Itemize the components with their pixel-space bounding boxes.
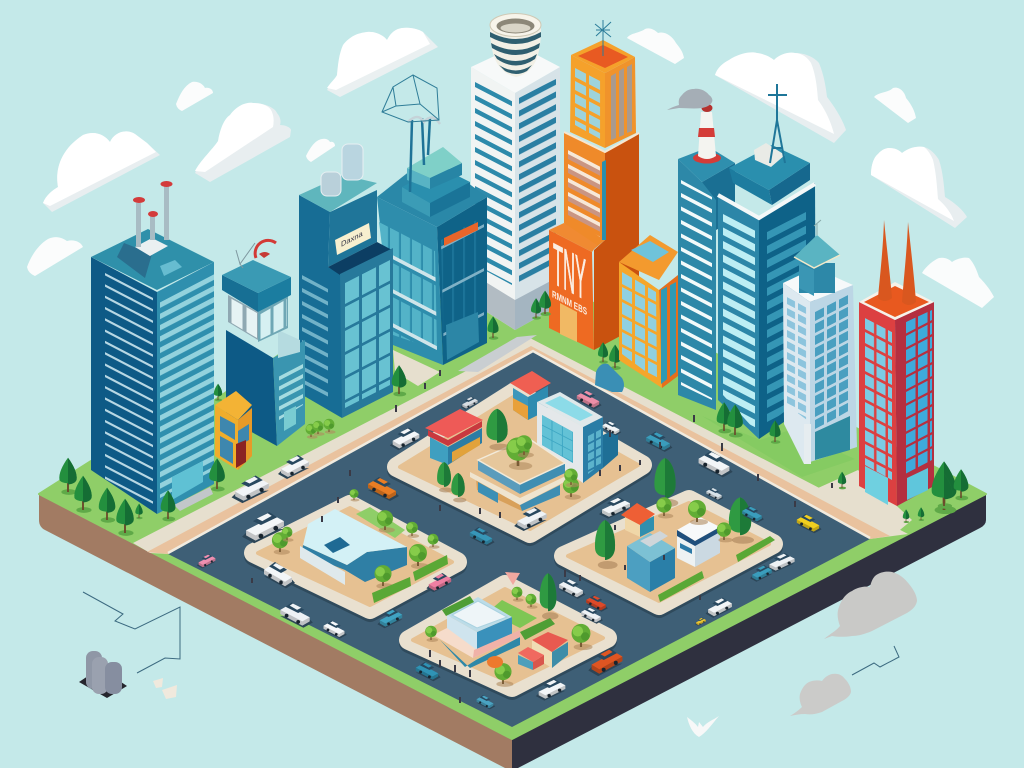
roof slab	[222, 260, 291, 312]
trees on left block	[272, 489, 440, 589]
blue glass tower with wire frame	[377, 75, 487, 365]
darker lawn under the towers	[702, 416, 855, 477]
cloud 11	[922, 258, 994, 308]
floating gray tanks	[79, 651, 127, 698]
plaza by the blue towers	[393, 350, 440, 386]
platform lawn surface	[39, 290, 986, 739]
middle right face	[594, 133, 639, 350]
yellow shop building	[215, 391, 252, 470]
roof tier	[402, 147, 470, 217]
orange planter	[487, 656, 503, 668]
tower left face	[783, 283, 810, 464]
bottom block hedges	[442, 596, 555, 640]
cloud 7	[627, 28, 684, 64]
tower roof	[471, 45, 560, 93]
cloud 10	[871, 147, 967, 228]
mid lawn conifers	[306, 365, 406, 439]
recessed dark band	[328, 242, 392, 275]
cloud 4	[176, 82, 213, 111]
mast tower	[768, 84, 787, 163]
lower body right face	[273, 340, 305, 446]
ground floor glass	[865, 466, 928, 505]
striped bowl on the roof	[490, 14, 541, 77]
rooftop glass tanks	[321, 144, 363, 196]
middle ledge	[564, 132, 639, 152]
roof antenna	[595, 20, 611, 56]
tower right face	[702, 163, 735, 230]
white and navy building	[677, 517, 720, 567]
pedestrians	[252, 370, 832, 703]
vented grill	[278, 330, 300, 358]
lawn trees by blue tower	[717, 402, 780, 444]
red tower with twin spires	[859, 220, 934, 506]
tower right face	[515, 67, 560, 330]
trees across the platform	[59, 365, 968, 536]
sign board	[335, 223, 371, 255]
cloud 2	[195, 103, 291, 182]
light blue roof warehouse	[300, 509, 407, 585]
vehicles on the road	[197, 390, 822, 709]
tower roof	[91, 229, 214, 290]
main left tower with rooftop stacks	[91, 181, 214, 514]
clouds	[27, 28, 994, 308]
top section roof	[571, 40, 635, 73]
road island: right block	[564, 458, 775, 608]
red roof houses	[518, 632, 568, 670]
trees on centre block	[437, 409, 581, 502]
roof unit	[754, 143, 785, 167]
trees on bottom block	[425, 573, 593, 687]
twin spires	[878, 220, 916, 305]
entrance glass	[172, 461, 203, 500]
tower roof	[299, 175, 377, 212]
hedges on left block	[372, 555, 448, 603]
main pavilion with pink awning	[433, 597, 520, 668]
white bird	[687, 716, 719, 737]
ground floor columns	[804, 416, 850, 464]
pink marker	[505, 572, 520, 585]
floating wire line left	[83, 592, 180, 673]
cloud 9	[874, 88, 916, 123]
floating white pebbles	[153, 678, 177, 699]
cloud 3	[327, 28, 438, 97]
yellow orange apartment block	[619, 235, 678, 388]
cloud 8	[715, 52, 846, 143]
stepped pavilion	[470, 438, 570, 511]
wire frame structure	[382, 75, 439, 122]
tower right face	[157, 262, 214, 514]
road curb	[168, 351, 870, 553]
rooftop stacks	[133, 181, 172, 247]
hedges on right block	[658, 536, 775, 602]
road island: centre block	[397, 371, 642, 536]
tower left face	[471, 67, 515, 330]
tower left face	[377, 197, 443, 365]
gray cloud large	[824, 572, 917, 639]
top section right face	[605, 57, 636, 148]
floating wire line right	[852, 646, 899, 675]
chimney	[693, 104, 721, 164]
orange landmark tower	[549, 20, 639, 350]
white and blue office	[537, 392, 618, 483]
rooftop dish and antennas	[236, 240, 276, 268]
tower left face	[678, 159, 716, 410]
blue block building	[627, 531, 675, 592]
platform soil side	[39, 494, 512, 768]
lawn trees beside orange tower	[488, 291, 621, 370]
other cars	[197, 390, 822, 709]
teal tower with sign	[299, 144, 393, 418]
plaza by the red tower	[818, 470, 912, 534]
tower base left	[471, 273, 515, 330]
top section left face	[570, 55, 605, 148]
glass floor	[228, 295, 258, 340]
base block left face with lettering: RMNM EBS	[552, 289, 587, 318]
tower right face	[759, 183, 816, 439]
teal chimney tower	[667, 89, 735, 410]
platform dark side	[512, 494, 986, 768]
orange landmark tower: TNY	[553, 231, 586, 313]
orange signage	[444, 222, 478, 246]
orange roof hut	[621, 503, 655, 537]
tower right face	[437, 197, 487, 365]
white parapet	[718, 184, 815, 218]
floating platform	[39, 290, 986, 768]
cloud 5	[27, 237, 83, 276]
base block left face with lettering	[549, 223, 597, 350]
tall blue tower with mast	[718, 84, 816, 439]
roof cap	[729, 145, 810, 205]
lawn patch	[488, 600, 537, 628]
road island: bottom block	[409, 572, 607, 690]
pale turret tower	[783, 220, 857, 464]
tower left face	[299, 195, 342, 418]
tower right face	[810, 285, 857, 462]
tower left face	[859, 302, 897, 506]
upper front face	[328, 190, 377, 267]
lower body left face	[226, 330, 277, 446]
tower roof	[678, 147, 735, 182]
glass lobby door	[446, 312, 479, 360]
tower base right	[515, 276, 560, 330]
antenna masts	[408, 117, 440, 192]
road island: left block	[254, 489, 457, 612]
paved sidewalk	[133, 338, 908, 554]
tower right face	[895, 302, 934, 506]
small tower with dish	[222, 240, 305, 446]
door	[284, 406, 296, 431]
sign board: Daxna	[341, 229, 363, 249]
trees on right block	[595, 458, 754, 569]
cloud 6	[306, 139, 335, 162]
gray cloud small	[790, 674, 851, 716]
turret	[794, 220, 840, 296]
white van upper left	[242, 512, 284, 543]
path behind the sidewalk	[458, 335, 537, 372]
central white striped tower	[471, 14, 560, 330]
glass facade	[340, 248, 393, 418]
red roof shop	[425, 409, 483, 465]
tower roof	[377, 155, 487, 227]
chimney smoke	[667, 89, 712, 110]
right corner conifers	[838, 461, 968, 523]
tower left face	[718, 197, 759, 439]
left corner conifers	[59, 384, 225, 536]
middle left face	[564, 132, 605, 250]
blue parked vehicle	[595, 364, 624, 392]
asphalt road	[168, 352, 870, 727]
tower roof	[783, 268, 853, 302]
tower left face	[91, 257, 157, 514]
white delivery truck	[264, 562, 295, 588]
tower roof	[859, 282, 934, 320]
small lawn patch	[356, 507, 405, 538]
tan footpath	[147, 346, 890, 554]
rooftop solar panels	[117, 238, 182, 278]
small red roof house at the back	[510, 371, 551, 420]
cloud 1	[43, 131, 160, 212]
